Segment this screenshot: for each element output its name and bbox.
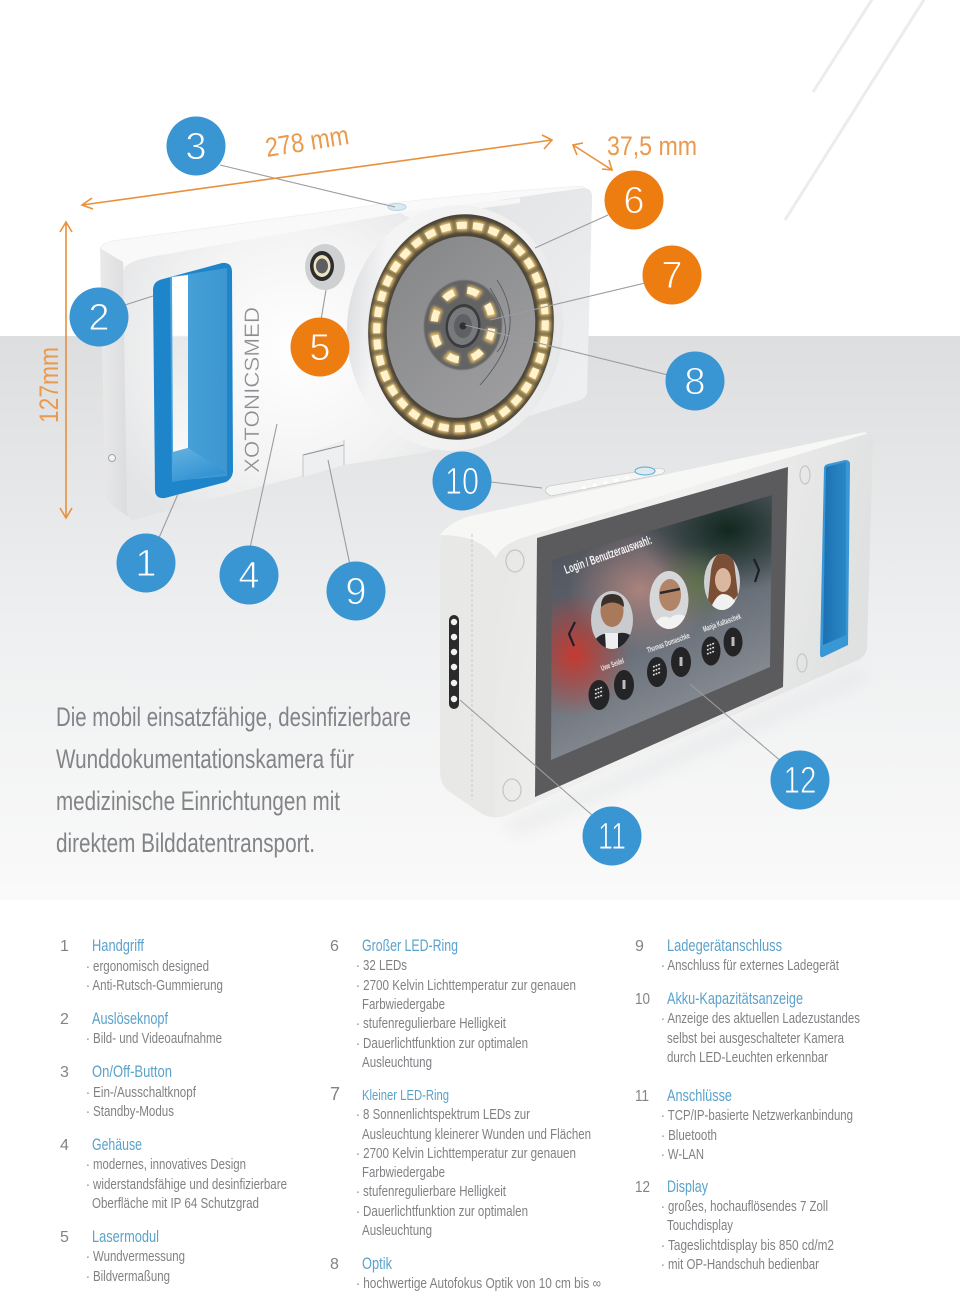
- marker 1: [116, 534, 176, 592]
- marker 10: 10: [445, 461, 479, 503]
- headline: [56, 702, 411, 858]
- marker 11: [582, 806, 642, 866]
- item 9 Ladegerätanschluss: · Anschluss für externes Ladegerät: [661, 958, 839, 974]
- dimension: 127mm: 127mm: [34, 347, 64, 423]
- item 9 Ladegerätanschluss: [635, 936, 839, 974]
- item 3 On/Off-Button: 3: [60, 1064, 69, 1081]
- item 5 Lasermodul: · Bildvermaßung: [86, 1269, 170, 1285]
- item 2 Auslöseknopf: Auslöseknopf: [92, 1009, 168, 1028]
- marker 5: 5: [309, 327, 331, 369]
- marker 9: 9: [345, 571, 367, 613]
- headline: direktem Bilddatentransport.: [56, 828, 315, 858]
- item 12 Display: Touchdisplay: [667, 1218, 734, 1234]
- item 1 Handgriff: · Anti-Rutsch-Gummierung: [86, 978, 223, 994]
- small LED ring and lens: [419, 276, 507, 374]
- marker 12: 12: [784, 760, 816, 802]
- item 5 Lasermodul: Lasermodul: [92, 1227, 159, 1246]
- feature column 1: [60, 936, 287, 1285]
- brand lettering: XOTONICSMED: [241, 307, 264, 473]
- item 10 Akku-Kapazitätsanzeige: · Anzeige des aktuellen Ladezustandes: [661, 1011, 860, 1027]
- item 6 Großer LED-Ring: Ausleuchtung: [362, 1055, 432, 1071]
- item 9 Ladegerätanschluss: 9: [635, 938, 644, 955]
- item 4 Gehäuse: Oberfläche mit IP 64 Schutzgrad: [92, 1196, 259, 1212]
- dimension: 278 mm: [82, 120, 552, 209]
- laser module: [305, 244, 345, 290]
- soft shadow: [500, 668, 868, 835]
- item 12 Display: · großes, hochauflösendes 7 Zoll: [661, 1199, 828, 1215]
- dimension: 278 mm: 278 mm: [263, 120, 351, 163]
- item 7 Kleiner LED-Ring: Ausleuchtung kleinerer Wunden und Flächen: [362, 1127, 591, 1143]
- item 5 Lasermodul: · Wundvermessung: [86, 1249, 185, 1265]
- device: front view with LED rings: [100, 186, 592, 520]
- item 4 Gehäuse: · modernes, innovatives Design: [86, 1157, 246, 1173]
- marker 12: [770, 750, 830, 810]
- item 6 Großer LED-Ring: Großer LED-Ring: [362, 936, 458, 955]
- item 2 Auslöseknopf: 2: [60, 1011, 69, 1028]
- item 8 Optik: Optik: [362, 1254, 392, 1273]
- on/off button: [388, 204, 406, 210]
- marker 6: 6: [623, 180, 645, 222]
- display heading: Login / Benutzerauswahl:: [562, 533, 654, 577]
- item 7 Kleiner LED-Ring: · 8 Sonnenlichtspektrum LEDs zur: [356, 1107, 530, 1123]
- item 7 Kleiner LED-Ring: 7: [330, 1084, 340, 1104]
- marker 7: [642, 246, 702, 304]
- item 4 Gehäuse: [60, 1135, 287, 1212]
- item 4 Gehäuse: · widerstandsfähige und desinfizierbare: [86, 1177, 287, 1193]
- item 7 Kleiner LED-Ring: [330, 1084, 591, 1239]
- user: Uwe Seidel: Uwe Seidel: [600, 656, 625, 673]
- item 4 Gehäuse: 4: [60, 1137, 69, 1154]
- item 10 Akku-Kapazitätsanzeige: 10: [635, 991, 650, 1008]
- item 10 Akku-Kapazitätsanzeige: [635, 989, 860, 1066]
- user: Manja Kaltaschek: Manja Kaltaschek: [702, 612, 743, 634]
- dimension: 127mm: [34, 222, 72, 518]
- user: Uwe Seidel: [588, 591, 636, 710]
- item 8 Optik: 8: [330, 1256, 339, 1273]
- handle grip: [153, 263, 233, 498]
- leader lines: [125, 165, 782, 815]
- marker 6: [604, 170, 664, 230]
- item 3 On/Off-Button: · Standby-Modus: [86, 1104, 174, 1120]
- user: Thomas Domaschke: [646, 571, 691, 687]
- item 2 Auslöseknopf: · Bild- und Videoaufnahme: [86, 1031, 222, 1047]
- item 6 Großer LED-Ring: Farbwiedergabe: [362, 997, 445, 1013]
- item 1 Handgriff: [60, 936, 223, 994]
- headline: medizinische Einrichtungen mit: [56, 786, 340, 816]
- item 1 Handgriff: 1: [60, 938, 69, 955]
- marker 7: 7: [661, 255, 683, 297]
- item 6 Großer LED-Ring: · Dauerlichtfunktion zur optimalen: [356, 1036, 528, 1052]
- rear handle grip: [820, 460, 850, 657]
- marker 4: [220, 546, 278, 604]
- battery indicator strip: [545, 467, 665, 496]
- item 1 Handgriff: Handgriff: [92, 936, 144, 955]
- item 11 Anschlüsse: · W-LAN: [661, 1147, 704, 1163]
- item 5 Lasermodul: 5: [60, 1229, 69, 1246]
- item 6 Großer LED-Ring: · stufenregulierbare Helligkeit: [356, 1016, 506, 1032]
- item 12 Display: 12: [635, 1179, 650, 1196]
- item 12 Display: · mit OP-Handschuh bedienbar: [661, 1257, 819, 1273]
- item 7 Kleiner LED-Ring: · Dauerlichtfunktion zur optimalen: [356, 1204, 528, 1220]
- navigation chevrons: [569, 559, 759, 646]
- marker 8: 8: [684, 361, 706, 403]
- marker 8: [666, 352, 724, 410]
- dimension: 37,5 mm: [573, 131, 697, 170]
- rear body: [440, 432, 873, 817]
- item 12 Display: [635, 1177, 834, 1273]
- item 1 Handgriff: · ergonomisch designed: [86, 959, 209, 975]
- headline: Die mobil einsatzfähige, desinfizierbare: [56, 702, 411, 732]
- user: Thomas Domaschke: Thomas Domaschke: [646, 631, 691, 655]
- marker 2: 2: [88, 297, 110, 339]
- shutter tab: [303, 440, 344, 477]
- display: [535, 467, 788, 797]
- display color wash: [551, 495, 772, 710]
- item 9 Ladegerätanschluss: Ladegerätanschluss: [667, 936, 782, 955]
- item 3 On/Off-Button: · Ein-/Ausschaltknopf: [86, 1085, 197, 1101]
- item 6 Großer LED-Ring: · 2700 Kelvin Lichttemperatur zur genauen: [356, 978, 576, 994]
- item 10 Akku-Kapazitätsanzeige: durch LED-Leuchten erkennbar: [667, 1050, 828, 1066]
- item 8 Optik: [330, 1254, 601, 1291]
- item 6 Großer LED-Ring: [330, 936, 576, 1071]
- item 12 Display: Display: [667, 1177, 708, 1196]
- item 7 Kleiner LED-Ring: Ausleuchtung: [362, 1223, 432, 1239]
- item 7 Kleiner LED-Ring: · 2700 Kelvin Lichttemperatur zur genauen: [356, 1146, 576, 1162]
- dimension: 37,5 mm: 37,5 mm: [607, 131, 697, 161]
- item 10 Akku-Kapazitätsanzeige: Akku-Kapazitätsanzeige: [667, 989, 803, 1008]
- headline: Wunddokumentationskamera für: [56, 744, 354, 774]
- item 2 Auslöseknopf: [60, 1009, 222, 1047]
- marker 4: 4: [238, 555, 260, 597]
- ring housing bulge: [333, 193, 577, 463]
- item 5 Lasermodul: [60, 1227, 185, 1285]
- item 6 Großer LED-Ring: · 32 LEDs: [356, 958, 407, 974]
- item 7 Kleiner LED-Ring: · stufenregulierbare Helligkeit: [356, 1184, 506, 1200]
- marker 3: [166, 116, 226, 176]
- item 6 Großer LED-Ring: 6: [330, 938, 339, 955]
- feature column 3: [635, 936, 860, 1273]
- user: Manja Kaltaschek: [702, 553, 743, 666]
- item 11 Anschlüsse: [635, 1086, 853, 1163]
- marker 10: [432, 452, 492, 510]
- marker 11: 11: [598, 816, 626, 858]
- side screw: [108, 454, 116, 462]
- item 7 Kleiner LED-Ring: Farbwiedergabe: [362, 1165, 445, 1181]
- device: rear view with display: [440, 432, 873, 835]
- item 10 Akku-Kapazitätsanzeige: selbst bei ausgeschalteter Kamera: [667, 1031, 845, 1047]
- marker 3: 3: [185, 126, 207, 168]
- corner screws: [503, 466, 810, 801]
- marker 2: [70, 288, 128, 346]
- marker 9: [326, 562, 386, 620]
- item 11 Anschlüsse: · TCP/IP-basierte Netzwerkanbindung: [661, 1108, 853, 1124]
- item 11 Anschlüsse: · Bluetooth: [661, 1128, 717, 1144]
- item 4 Gehäuse: Gehäuse: [92, 1135, 142, 1154]
- marker 5: [290, 318, 350, 376]
- feature column 2: [330, 936, 601, 1291]
- speaker contacts: [449, 615, 459, 709]
- marker 1: 1: [135, 543, 157, 585]
- item 12 Display: · Tageslichtdisplay bis 850 cd/m2: [661, 1238, 834, 1254]
- item 11 Anschlüsse: Anschlüsse: [667, 1086, 732, 1105]
- item 3 On/Off-Button: On/Off-Button: [92, 1062, 172, 1081]
- item 11 Anschlüsse: 11: [635, 1088, 649, 1105]
- device body: [100, 186, 592, 520]
- large LED ring: [355, 204, 567, 450]
- item 3 On/Off-Button: [60, 1062, 197, 1120]
- item 7 Kleiner LED-Ring: Kleiner LED-Ring: [362, 1087, 449, 1104]
